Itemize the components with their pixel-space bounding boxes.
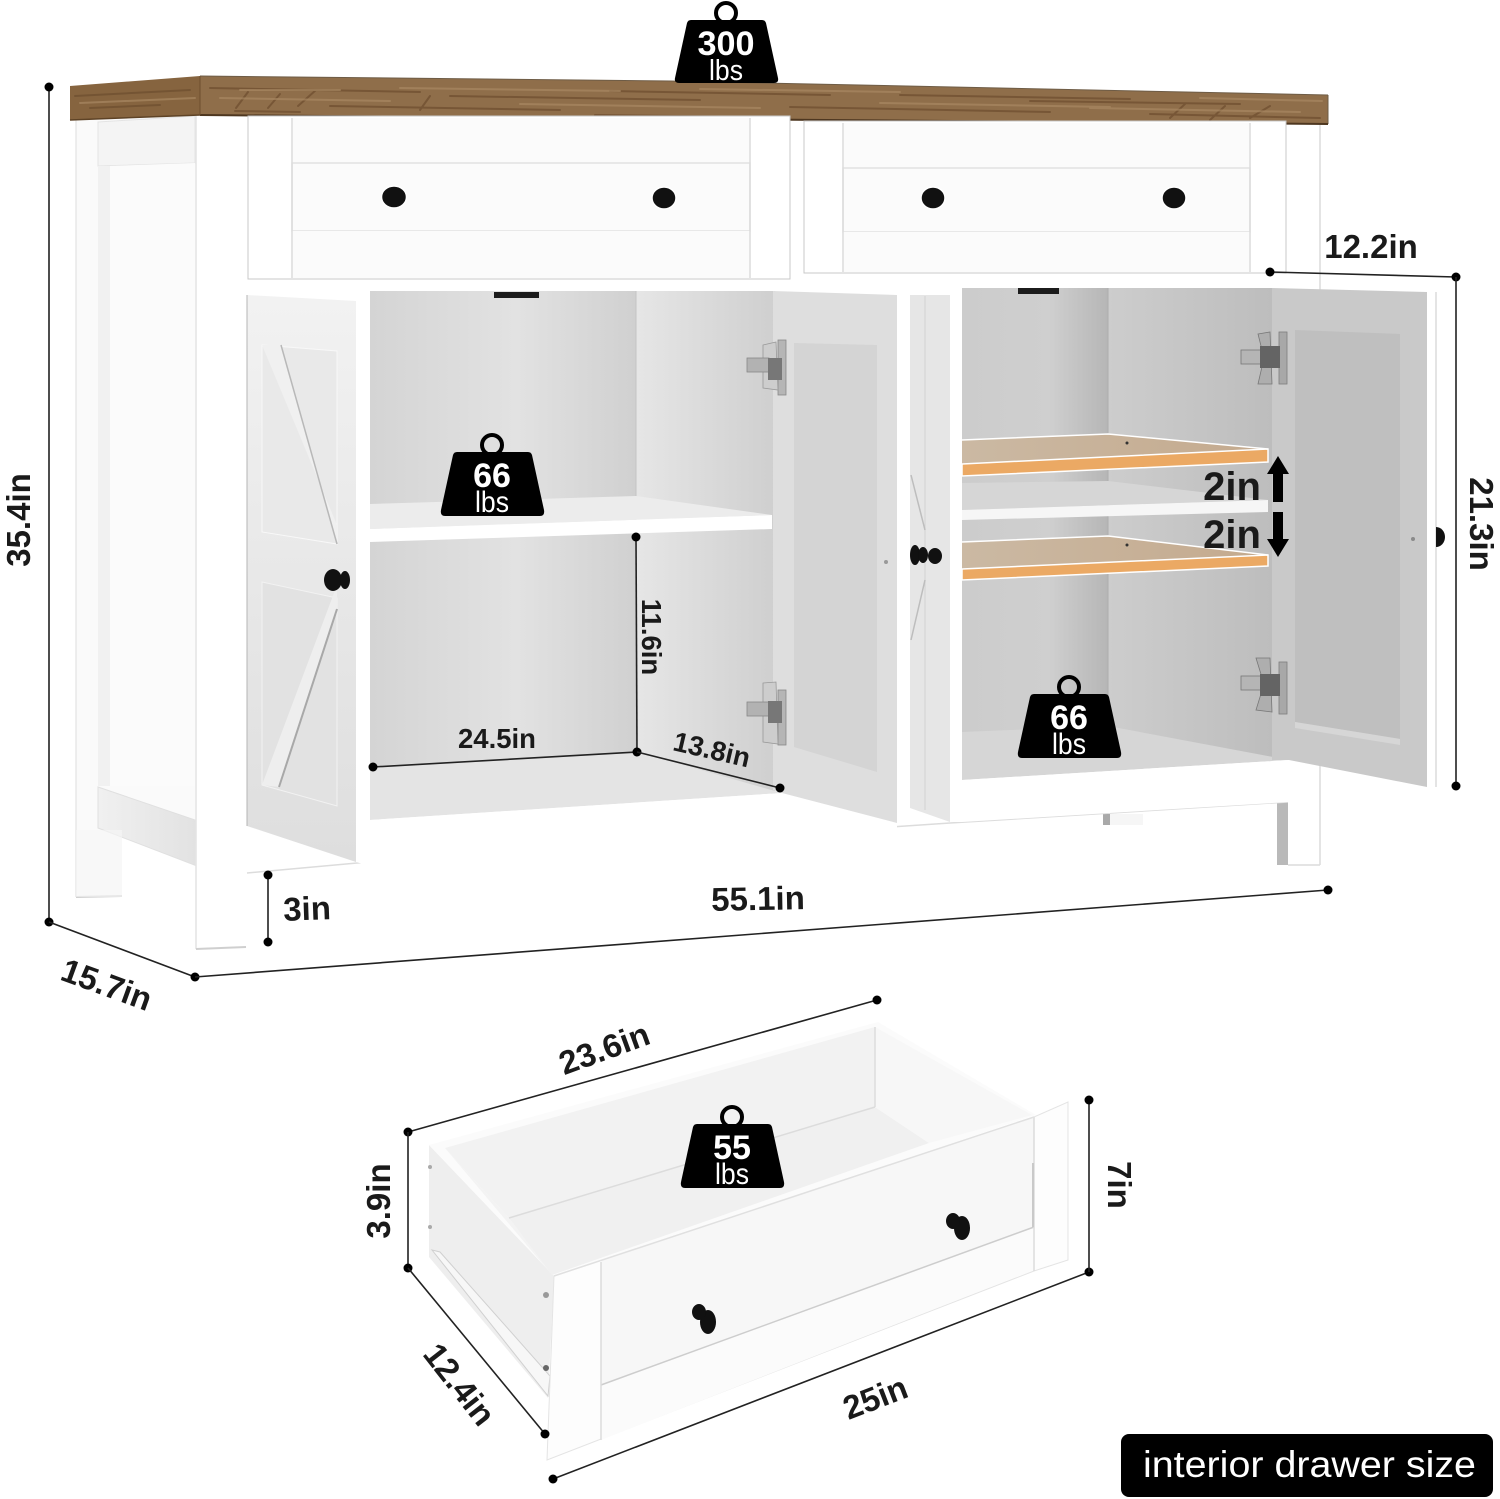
shelf adjustment label lower 2in bbox=[1203, 512, 1289, 557]
weight badge 55 lbs: lbs bbox=[715, 1158, 749, 1191]
shelf position lower bbox=[962, 536, 1268, 580]
hinge upper right compartment bbox=[1241, 332, 1287, 384]
door knob bbox=[910, 545, 942, 565]
weight badge 300 lbs: lbs bbox=[709, 55, 743, 87]
right door bbox=[1272, 288, 1445, 787]
hinge lower right compartment bbox=[1241, 658, 1287, 714]
interior drawer size label: interior drawer size bbox=[1143, 1444, 1476, 1485]
dimension: width 55.1in: 55.1in bbox=[711, 879, 805, 918]
weight badge 66 lbs left shelf bbox=[441, 435, 544, 519]
drawer knobs bbox=[921, 187, 1186, 209]
dimension: shelf clearance 11.6in bbox=[632, 532, 667, 752]
weight badge 300 lbs: 300 bbox=[698, 25, 754, 63]
door knob bbox=[324, 569, 350, 591]
dimension: drawer front 25in: 25in bbox=[838, 1368, 913, 1427]
hinge upper left compartment bbox=[747, 340, 786, 395]
dimension: depth 15.7in: 15.7in bbox=[57, 951, 157, 1018]
dimension: drawer interior height 3.9in: 3.9in bbox=[360, 1163, 397, 1239]
dimension: door height 21.3in bbox=[1452, 277, 1500, 790]
adjustable shelf bbox=[962, 481, 1268, 520]
right door of left compartment bbox=[773, 291, 910, 825]
sideboard cabinet bbox=[70, 76, 1445, 950]
dimension: width 55.1in bbox=[195, 879, 1332, 977]
weight badge 66 lbs left shelf: 66 bbox=[473, 457, 511, 495]
drawer front panel bbox=[547, 1102, 1068, 1460]
weight badge 66 lbs left shelf: lbs bbox=[475, 486, 509, 519]
drawer outer side bbox=[429, 1145, 554, 1398]
arrow down bbox=[1267, 512, 1289, 557]
dimension: drawer interior height 3.9in bbox=[360, 1132, 412, 1272]
dimension: drawer front 25in bbox=[548, 1268, 1094, 1484]
dimension: interior depth 12.2in bbox=[1266, 228, 1460, 282]
shelf adjustment label upper 2in: 2in bbox=[1203, 465, 1261, 509]
cabinet bottom edge bbox=[247, 802, 1288, 873]
dimension: interior depth 13.8in bbox=[637, 726, 784, 792]
left door of right compartment bbox=[910, 295, 962, 822]
arrow up bbox=[1267, 456, 1289, 502]
wood top bbox=[70, 76, 1328, 124]
dimension: drawer length 23.6in bbox=[404, 996, 882, 1136]
drawer knobs bbox=[692, 1213, 970, 1334]
drawer interior bbox=[429, 1022, 1036, 1276]
dimension: depth 15.7in bbox=[49, 922, 200, 1018]
dimension: interior width 24.5in bbox=[368, 723, 642, 772]
open drawer bbox=[428, 1022, 1068, 1460]
right drawer bbox=[804, 121, 1286, 273]
dimension: drawer front height 7in: 7in bbox=[1101, 1161, 1138, 1209]
front leg left bbox=[196, 114, 246, 950]
weight badge 66 lbs right floor: lbs bbox=[1052, 728, 1086, 761]
drawer slide bbox=[428, 1165, 550, 1396]
shelf position upper bbox=[962, 434, 1268, 476]
left compartment interior bbox=[370, 291, 897, 866]
dimension: leg 3in bbox=[264, 870, 331, 946]
dimension: height 35.4in bbox=[0, 82, 54, 926]
right leg and rear foot bbox=[1103, 122, 1320, 865]
dimension: shelf clearance 11.6in: 11.6in bbox=[636, 599, 667, 675]
drawer knobs bbox=[382, 186, 676, 209]
dimension: leg 3in: 3in bbox=[283, 889, 331, 928]
shelf adjustment label upper 2in bbox=[1203, 456, 1289, 509]
interior drawer size label bbox=[1121, 1434, 1493, 1497]
dimension: door height 21.3in: 21.3in bbox=[1463, 477, 1500, 571]
dimension: drawer depth 12.4in: 12.4in bbox=[416, 1336, 503, 1433]
hinge lower left compartment bbox=[747, 682, 786, 745]
left drawer bbox=[248, 116, 790, 279]
shelf adjustment label lower 2in: 2in bbox=[1203, 513, 1261, 557]
weight badge 55 lbs: 55 bbox=[713, 1129, 751, 1167]
weight badge 66 lbs right floor: 66 bbox=[1050, 699, 1088, 737]
right compartment interior bbox=[962, 288, 1289, 822]
dimension: interior width 24.5in: 24.5in bbox=[458, 723, 536, 754]
weight badge 55 lbs bbox=[681, 1107, 784, 1191]
left compartment shelf bbox=[370, 496, 772, 542]
dimension: drawer front height 7in bbox=[1084, 1096, 1138, 1272]
partial knob behind door bbox=[1436, 527, 1445, 547]
dimension: drawer depth 12.4in bbox=[408, 1268, 550, 1438]
dimension: interior depth 13.8in: 13.8in bbox=[670, 726, 753, 773]
left door with cross brace bbox=[247, 295, 370, 866]
weight badge 300 lbs bbox=[675, 3, 778, 87]
dimension: drawer length 23.6in: 23.6in bbox=[554, 1015, 654, 1082]
side panel of cabinet bbox=[76, 114, 197, 897]
dimension: interior depth 12.2in: 12.2in bbox=[1324, 228, 1418, 265]
dimension: height 35.4in: 35.4in bbox=[0, 473, 37, 567]
weight badge 66 lbs right floor bbox=[1018, 677, 1121, 761]
